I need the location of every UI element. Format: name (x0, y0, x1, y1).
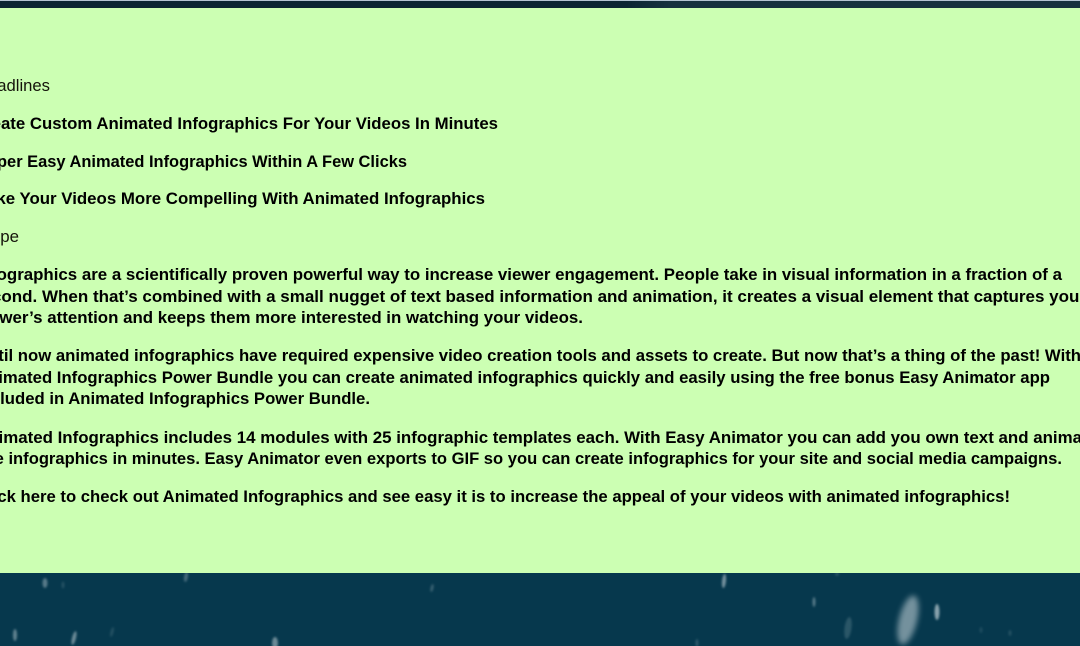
footer background with snow drops (0, 572, 1080, 646)
paragraph: why infographics work: Infographics are a scientifically proven powerful way to increase viewer engagement. People take in visual information in a fraction of a (0, 265, 1063, 284)
paragraph: call to action: Click here to check out Animated Infographics and see easy it is to increase the appeal of your videos with animated infographics! (0, 487, 1010, 506)
paragraph: modules: the infographics in minutes. Easy Animator even exports to GIF so you can create infographics for your site and social media campaigns. (0, 449, 1062, 468)
top header strip (0, 0, 1080, 8)
paragraph: why infographics work: second. When that’s combined with a small nugget of text based information and animation, it creates a visual element that captures your (0, 287, 1080, 306)
paragraph: modules (0, 428, 1080, 468)
paragraph: power bundle (0, 346, 1080, 408)
headline list (0, 114, 498, 208)
paragraph: power bundle: Animated Infographics Power Bundle you can create animated infographics quickly and easily using the free bonus Easy Animator app (0, 368, 1050, 387)
paragraph: why infographics work (0, 265, 1080, 327)
